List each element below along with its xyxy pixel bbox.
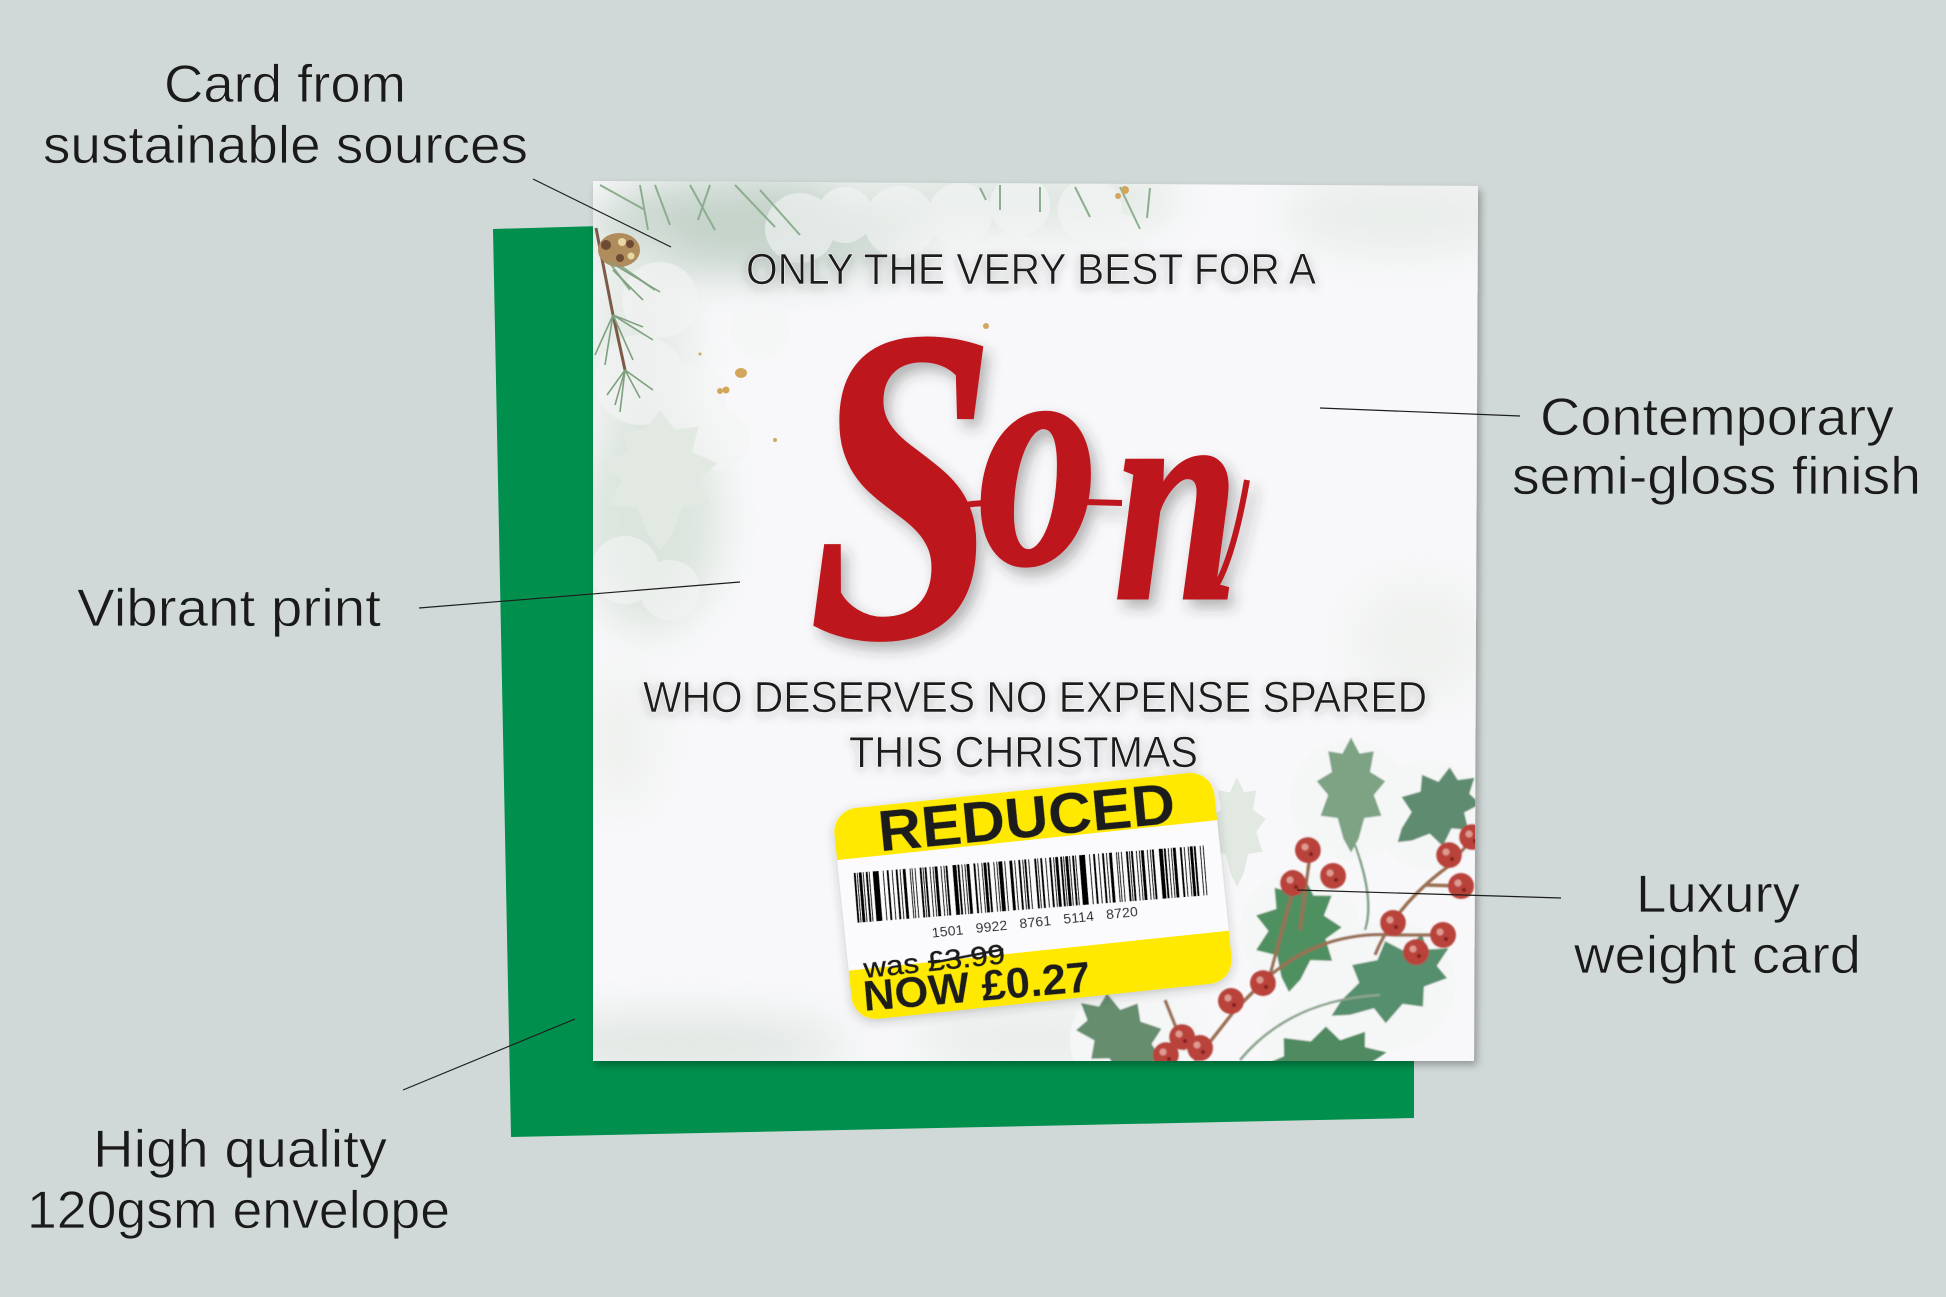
barcode digits: 1501 9922 8761 5114 8720 [931,903,1139,941]
envelope [493,226,1414,1137]
branches [1165,840,1471,1061]
barcode [856,870,1207,898]
holly leaves [1317,738,1385,852]
card heading: only the very best: ONLY THE VERY BEST FOR A [746,245,1317,294]
reduced price sticker [831,764,1235,1026]
was price: was £3.99 [861,938,1006,984]
callout: sustainable sources [43,55,671,247]
callout: vibrant print: Vibrant print [77,579,381,638]
pine cone and branch [595,228,660,412]
holly cluster [1070,737,1476,1061]
script word: Son: o [978,279,1098,633]
script word: Son: n [1114,332,1239,664]
pine sprigs top [600,185,1150,290]
card text: this christmas: THIS CHRISTMAS [849,728,1198,777]
callout: luxury weight card [1297,865,1861,985]
callout: semi-gloss finish [1320,388,1921,506]
callout: luxury weight card: weight card [1573,926,1861,985]
watercolour foliage background [593,182,1478,1061]
script word: Son [809,237,1247,734]
callout: semi-gloss finish: Contemporary [1540,388,1895,447]
callout: vibrant print [77,579,740,638]
greeting card [592,180,1486,1070]
callout: envelope [27,1019,575,1240]
callout: sustainable sources: sustainable sources [43,116,528,175]
script word: Son: S [809,237,996,734]
card text: who deserves no expense spared: WHO DESERVES NO EXPENSE SPARED [643,673,1427,722]
callout: envelope: High quality [93,1120,388,1179]
gold speckles [698,186,1129,442]
sticker heading: REDUCED [875,771,1178,864]
white halo [1070,741,1476,1061]
berries [1153,824,1485,1068]
pale holly leaves [602,410,1266,887]
callout: semi-gloss finish: semi-gloss finish [1512,447,1921,506]
callout: sustainable sources: Card from [164,55,406,114]
yellow bands [832,771,1234,1021]
callout: luxury weight card: Luxury [1636,865,1801,924]
now price: NOW £0.27 [861,953,1092,1021]
callout: envelope: 120gsm envelope [27,1181,450,1240]
